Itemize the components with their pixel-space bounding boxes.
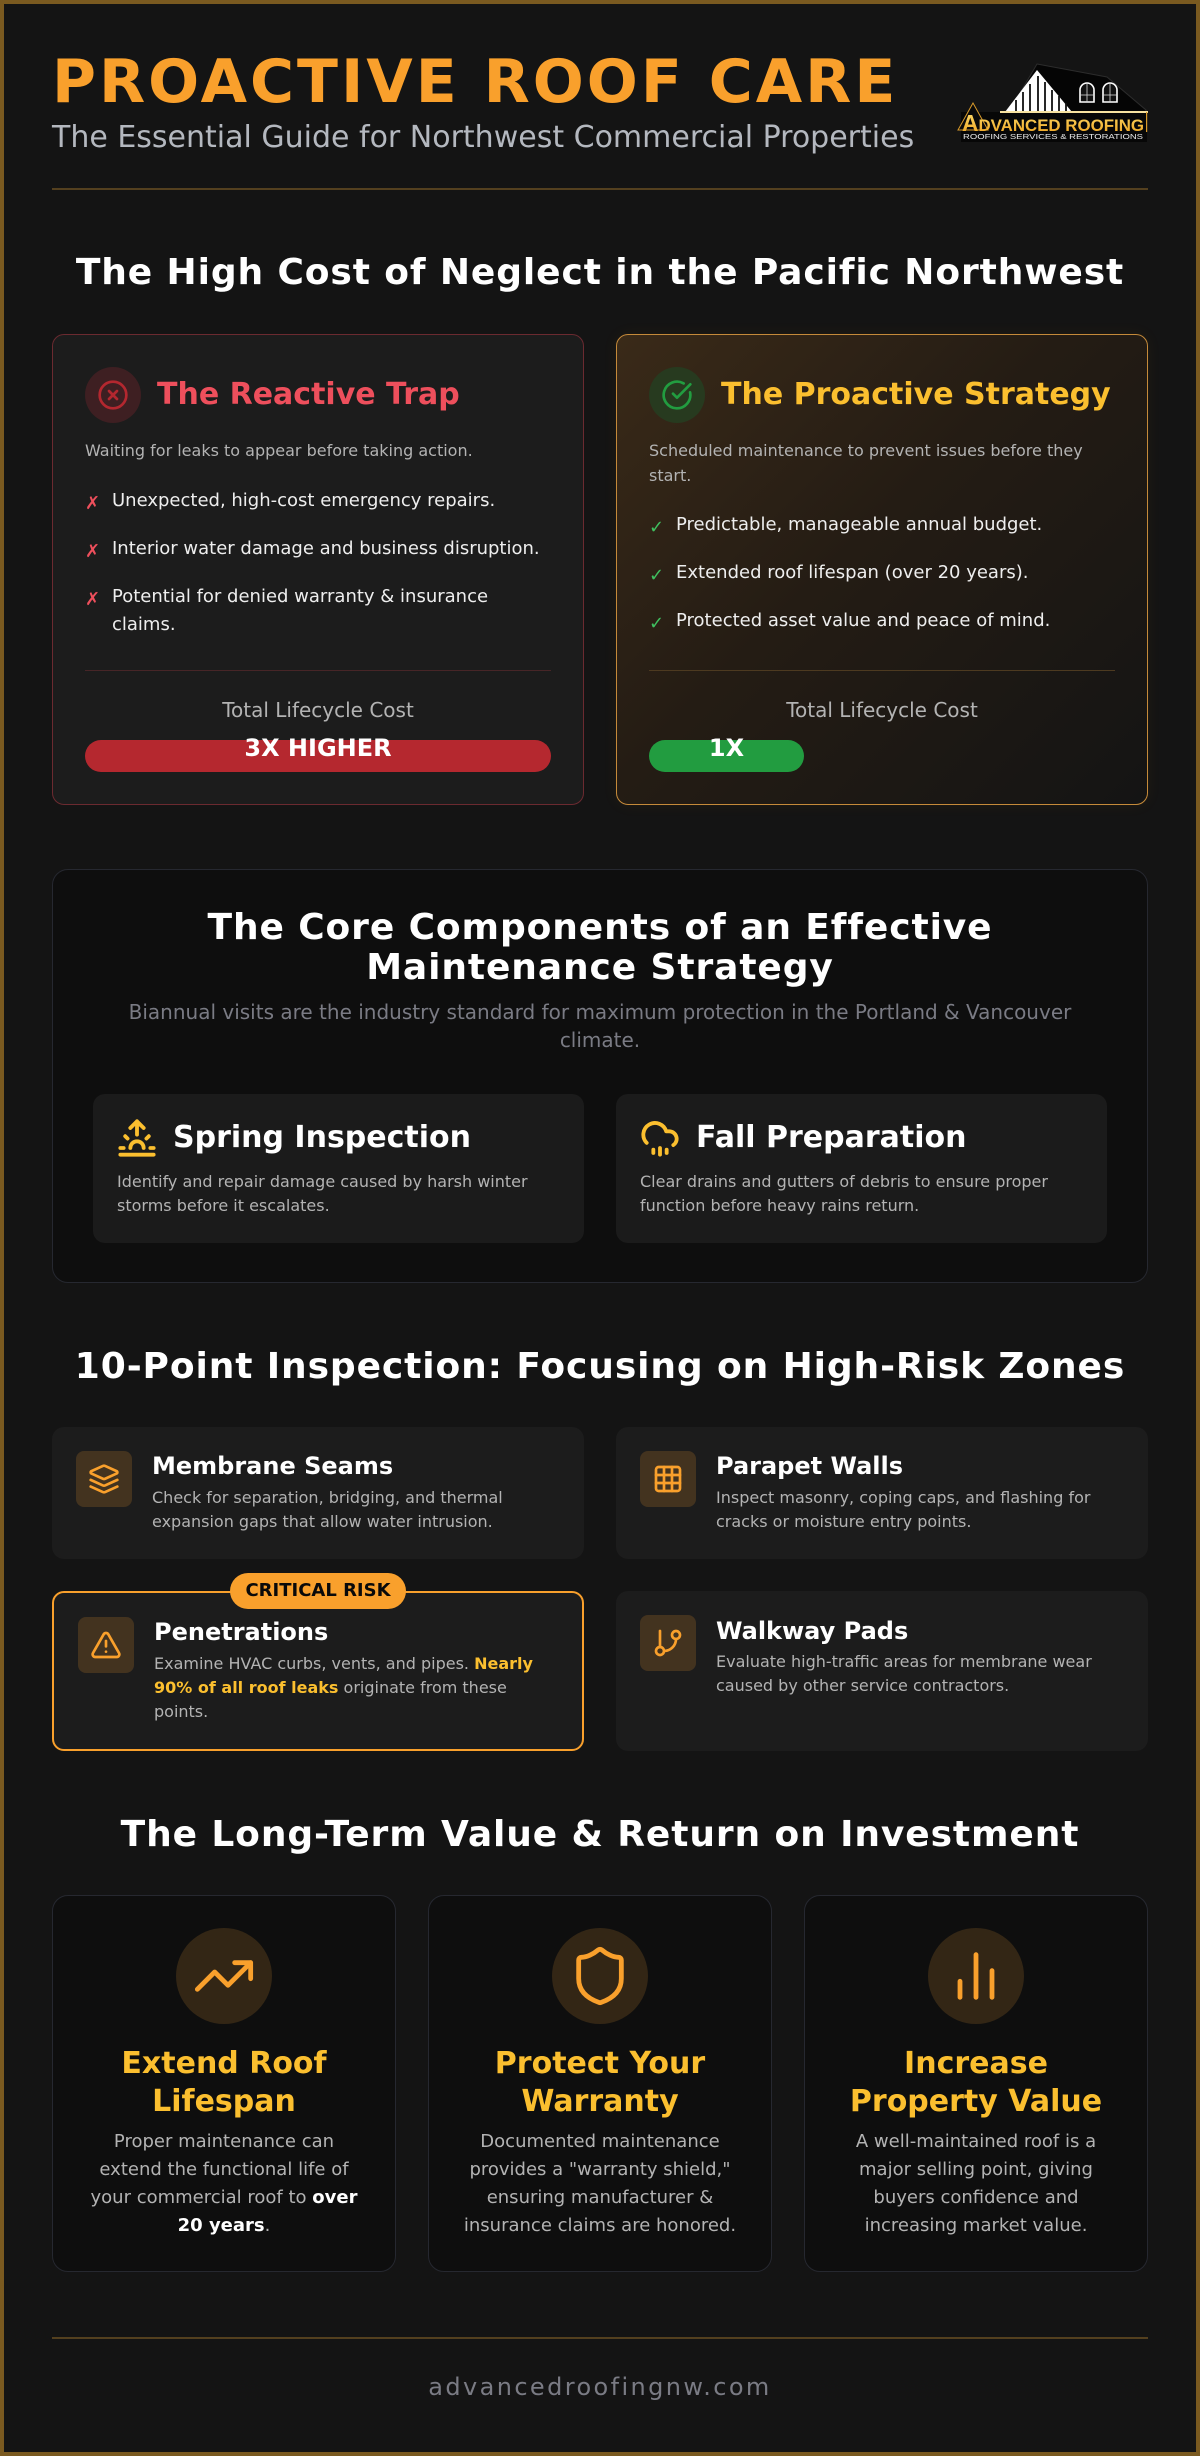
title: Lifespan: [152, 2084, 296, 2118]
icon: check in circle: [649, 367, 705, 423]
badge: critical risk: [230, 1573, 406, 1609]
description: climate.: [560, 1028, 640, 1052]
text: ensuring manufacturer &: [487, 2187, 713, 2208]
list: proactive benefits: Protected asset value and peace of mind.: [676, 610, 1050, 631]
icon: grid: [640, 1451, 696, 1507]
title: Extend Roof: [121, 2046, 327, 2081]
card: parapet walls: [616, 1427, 1148, 1559]
icon: rain cloud: [641, 1121, 679, 1157]
text: Evaluate high-traffic areas for membrane wear: [716, 1652, 1092, 1671]
icon: shield: [552, 1928, 648, 2024]
list: reactive risks: ✗: [85, 493, 100, 514]
list: proactive benefits: ✓: [649, 517, 664, 538]
text: Inspect masonry, coping caps, and flashing for: [716, 1488, 1090, 1507]
text: Clear drains and gutters of debris to ensure proper: [640, 1172, 1048, 1191]
title: Walkway Pads: [716, 1617, 908, 1645]
cost label: Total Lifecycle Cost: [222, 698, 414, 722]
icon: sunrise: [118, 1119, 156, 1157]
description: start.: [649, 466, 691, 485]
text: caused by other service contractors.: [716, 1676, 1009, 1695]
footer divider line: [52, 2337, 1148, 2339]
text: extend the functional life of: [99, 2159, 349, 2180]
text: [152, 1488, 503, 1531]
card: extend roof lifespan: [52, 1895, 396, 2272]
title: Increase: [904, 2046, 1048, 2081]
cost bar: 1X: [649, 740, 804, 772]
heading: fall: Fall Preparation: [696, 1120, 966, 1155]
icon: layers: [76, 1451, 132, 1507]
logo tagline: ROOFING SERVICES & RESTORATIONS: [963, 132, 1143, 141]
text: your commercial roof to over: [90, 2187, 357, 2208]
card: increase property value: [804, 1895, 1148, 2272]
list: reactive risks: Unexpected, high-cost emergency repairs.: [112, 490, 495, 511]
logo: Advanced Roofing: [957, 64, 1148, 142]
text: increasing market value.: [865, 2215, 1087, 2236]
text: insurance claims are honored.: [464, 2215, 736, 2236]
text: expansion gaps that allow water intrusion.: [152, 1512, 493, 1531]
card: penetrations critical: [52, 1591, 584, 1751]
text: [464, 2131, 736, 2236]
icon: bar chart: [928, 1928, 1024, 2024]
title: Parapet Walls: [716, 1452, 903, 1480]
text: major selling point, giving: [859, 2159, 1093, 2180]
description: [649, 441, 1083, 485]
list: reactive risks: ✗: [85, 541, 100, 562]
divider: [649, 670, 1115, 671]
card: spring inspection: [93, 1094, 584, 1243]
list: reactive risks: Interior water damage and business disruption.: [112, 538, 540, 559]
card: membrane seams: [52, 1427, 584, 1559]
subtitle: The Essential Guide for Northwest Commercial Properties: [52, 120, 914, 155]
text: storms before it escalates.: [117, 1196, 330, 1215]
text: Documented maintenance: [480, 2131, 720, 2152]
panel: core components: [52, 869, 1148, 1283]
title: [850, 2046, 1102, 2118]
card: fall preparation: [616, 1094, 1107, 1243]
text: provides a "warranty shield,": [469, 2159, 731, 2180]
title: Warranty: [521, 2084, 679, 2118]
header divider line: [52, 188, 1148, 190]
text: [856, 2131, 1096, 2236]
text: [90, 2131, 358, 2236]
icon: trending up: [176, 1928, 272, 2024]
text: [716, 1488, 1090, 1531]
badge: critical risk: CRITICAL RISK: [245, 1580, 391, 1601]
heading: spring: Spring Inspection: [173, 1120, 471, 1155]
text: points.: [154, 1702, 208, 1721]
title: [495, 2046, 706, 2118]
heading: proactive strategy: The Proactive Strategy: [721, 377, 1111, 412]
text: Examine HVAC curbs, vents, and pipes. Nearly: [154, 1654, 533, 1673]
text: [640, 1172, 1048, 1215]
divider: [85, 670, 551, 671]
card: walkway pads: [616, 1591, 1148, 1751]
list: reactive risks: ✗: [85, 589, 100, 610]
icon: x in circle: [85, 367, 141, 423]
logo wordmark: ADVANCED ROOFING: [962, 110, 1144, 136]
text: Check for separation, bridging, and thermal: [152, 1488, 503, 1507]
heading: core components: Maintenance Strategy: [366, 947, 834, 988]
title: Protect Your: [495, 2046, 705, 2081]
text: [154, 1654, 533, 1721]
list: proactive benefits: ✓: [649, 565, 664, 586]
text: cracks or moisture entry points.: [716, 1512, 971, 1531]
description: [129, 1000, 1072, 1052]
cost label: Total Lifecycle Cost: [786, 698, 978, 722]
heading: high cost of neglect: The High Cost of Neglect in the Pacific Northwest: [76, 252, 1124, 293]
heading: long-term value: The Long-Term Value & Return on Investment: [121, 1814, 1079, 1855]
cost bar: 3X higher: [85, 740, 551, 772]
text: function before heavy rains return.: [640, 1196, 919, 1215]
list: reactive risks: claims.: [112, 614, 176, 635]
icon: branch: [640, 1615, 696, 1671]
title: PROACTIVE ROOF CARE: [52, 47, 898, 117]
title: Membrane Seams: [152, 1452, 393, 1480]
list: proactive benefits: Predictable, manageable annual budget.: [676, 514, 1042, 535]
text: [716, 1652, 1092, 1695]
cost bar: 3X higher: 3X HIGHER: [244, 734, 392, 762]
cost bar: 1X: 1X: [709, 734, 744, 762]
heading: core components: [208, 907, 992, 988]
heading: core components: The Core Components of an Effective: [208, 907, 992, 948]
title: Penetrations: [154, 1618, 328, 1646]
text: 20 years.: [178, 2215, 270, 2236]
title: [121, 2046, 327, 2118]
icon: warning triangle: [78, 1617, 134, 1673]
list: reactive risks: [85, 490, 540, 635]
panel: the proactive strategy: [616, 334, 1148, 805]
heading: 10-point inspection: 10-Point Inspection: Focusing on High-Risk Zones: [75, 1346, 1125, 1387]
description: Biannual visits are the industry standard for maximum protection in the Portland & Vancouver: [129, 1000, 1071, 1024]
text: Identify and repair damage caused by harsh winter: [117, 1172, 528, 1191]
footer: website: advancedroofingnw.com: [428, 2373, 772, 2401]
description: Waiting for leaks to appear before taking action.: [85, 441, 473, 460]
text: buyers confidence and: [873, 2187, 1079, 2208]
text: A well-maintained roof is a: [856, 2131, 1096, 2152]
description: Scheduled maintenance to prevent issues before they: [649, 441, 1083, 460]
text: 90% of all roof leaks originate from these: [154, 1678, 507, 1697]
list: proactive benefits: Extended roof lifespan (over 20 years).: [676, 562, 1028, 583]
text: [117, 1172, 528, 1215]
panel: the reactive trap: [52, 334, 584, 805]
list: proactive benefits: [649, 514, 1050, 634]
heading: reactive trap: The Reactive Trap: [157, 377, 460, 412]
list: reactive risks: Potential for denied warranty & insurance: [112, 586, 488, 607]
card: protect warranty: [428, 1895, 772, 2272]
list: proactive benefits: ✓: [649, 613, 664, 634]
title: Property Value: [850, 2084, 1102, 2118]
text: Proper maintenance can: [114, 2131, 334, 2152]
